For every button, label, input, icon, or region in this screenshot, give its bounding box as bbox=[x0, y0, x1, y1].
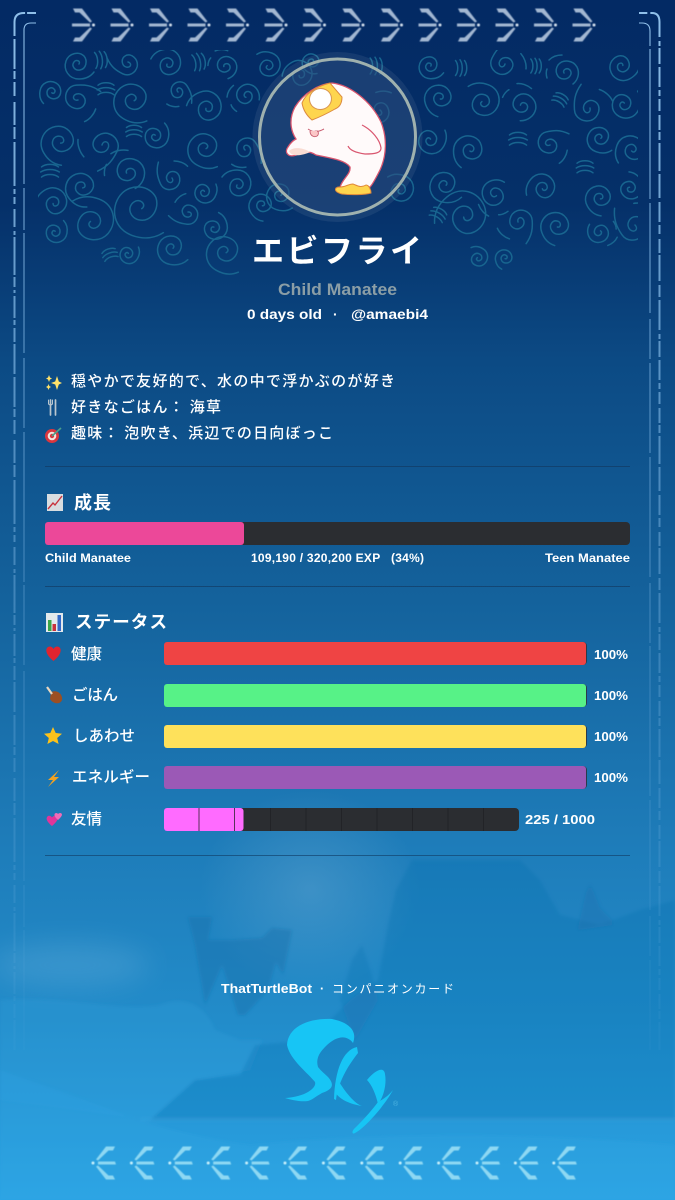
divider bbox=[45, 855, 630, 856]
row: food: ごはん bbox=[72, 683, 118, 705]
experience bar bbox=[45, 522, 630, 545]
icon: manatee character bbox=[286, 83, 385, 195]
icon: sparkles bbox=[46, 375, 62, 390]
row: happiness: しあわせ bbox=[73, 724, 135, 746]
age and owner: 0 days old bbox=[247, 306, 322, 322]
icon: Sky logo: ® bbox=[393, 1100, 399, 1108]
row: happiness bbox=[44, 724, 628, 748]
footer credit bbox=[221, 980, 454, 997]
row: energy: 100% bbox=[594, 770, 628, 785]
growth heading: 成長 bbox=[74, 489, 111, 515]
background scenery: mountains and sea bbox=[0, 790, 675, 1200]
current stage label: Child Manatee bbox=[45, 551, 131, 565]
icon: fork and knife bbox=[48, 400, 56, 415]
row: energy: エネルギー bbox=[72, 765, 150, 787]
left border frame bbox=[14, 13, 36, 1050]
row: food: 100% bbox=[594, 688, 628, 703]
top chevron row bbox=[72, 8, 596, 42]
avatar medallion bbox=[252, 52, 422, 222]
row: health: 100% bbox=[594, 647, 628, 662]
row: energy bbox=[48, 765, 628, 789]
row: friendship bbox=[47, 807, 595, 831]
personality traits bbox=[45, 370, 395, 443]
age and owner: · bbox=[333, 306, 338, 322]
right border frame bbox=[639, 13, 660, 1050]
panel: status bbox=[44, 609, 628, 831]
row: happiness: 100% bbox=[594, 729, 628, 744]
trait: favourite food: 好きなごはん： 海草 bbox=[71, 396, 221, 417]
row: friendship: 友情 bbox=[71, 807, 102, 829]
row: health: 健康 bbox=[71, 642, 102, 664]
divider bbox=[45, 466, 630, 467]
swirl pattern bbox=[32, 39, 652, 280]
trait: hobby: 趣味： 泡吹き、浜辺での日向ぼっこ bbox=[71, 422, 333, 443]
row: friendship: 225 / 1000 bbox=[525, 812, 595, 827]
divider bbox=[45, 586, 630, 587]
footer credit: コンパニオンカード bbox=[332, 980, 454, 997]
age and owner: @amaebi4 bbox=[351, 306, 428, 322]
row: food bbox=[47, 683, 628, 707]
row: health bbox=[46, 642, 628, 665]
icon: chart rising bbox=[47, 494, 63, 511]
name title: エビフライ bbox=[252, 226, 422, 272]
trait: temperament: 穏やかで友好的で、水の中で浮かぶのが好き bbox=[71, 370, 395, 391]
icon: Sky logo bbox=[285, 1019, 399, 1134]
next stage label: Teen Manatee bbox=[545, 551, 630, 565]
age and owner bbox=[247, 306, 428, 322]
status heading: ステータス bbox=[75, 609, 167, 634]
experience value: 109,190 / 320,200 EXP (34%) bbox=[251, 551, 424, 565]
icon: bar chart bbox=[46, 613, 63, 632]
bottom chevron row bbox=[92, 1146, 577, 1180]
footer credit: ThatTurtleBot bbox=[221, 982, 313, 996]
icon: dart target bbox=[45, 428, 61, 443]
species subtitle: Child Manatee bbox=[278, 281, 397, 299]
footer credit: · bbox=[320, 982, 324, 996]
panel: growth bbox=[45, 489, 630, 565]
